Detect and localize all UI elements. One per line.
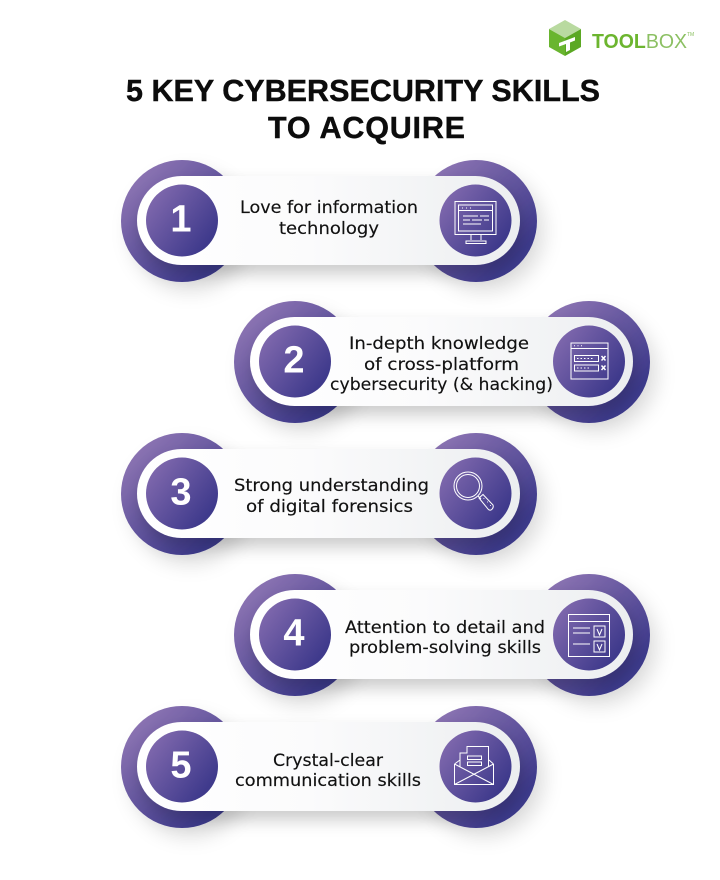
icon: green cube [549, 20, 581, 56]
icon: checklist window [568, 614, 610, 656]
panel: skill 1 [121, 160, 537, 282]
title: 5 KEY CYBERSECURITY SKILLS [126, 74, 600, 108]
number 4: 4 [283, 612, 305, 654]
trademark: TM [687, 32, 694, 38]
logo [549, 20, 694, 56]
text: skill 3 [234, 476, 429, 516]
icon: magnifying glass [454, 472, 493, 510]
text: skill 3: of digital forensics [246, 497, 413, 516]
text: skill 2: cybersecurity (& hacking) [330, 375, 553, 394]
logo wordmark: TOOLBOX [592, 30, 687, 53]
text: skill 5 [235, 751, 421, 790]
icon: open envelope with letter [454, 746, 494, 784]
text: skill 4 [345, 618, 545, 657]
text: skill 5: communication skills [235, 771, 421, 790]
text: skill 2: In-depth knowledge [349, 334, 529, 353]
title: TO ACQUIRE [268, 111, 465, 145]
number 5: 5 [170, 744, 192, 786]
text: skill 5: Crystal-clear [273, 751, 383, 770]
panel: skill 5 [121, 706, 537, 828]
icon: computer monitor [455, 202, 496, 244]
text: skill 1: technology [279, 219, 379, 238]
number 3: 3 [170, 472, 192, 514]
panel: skill 4 [234, 574, 650, 696]
number 1: 1 [170, 198, 192, 240]
panel: skill 3 [121, 433, 537, 555]
text: skill 1: Love for information [240, 198, 418, 217]
text: skill 4: Attention to detail and [345, 618, 545, 637]
number 2: 2 [283, 340, 305, 382]
text: skill 1 [240, 198, 418, 238]
title [126, 74, 600, 145]
icon: browser form with crosses [571, 343, 608, 379]
text: skill 4: problem-solving skills [349, 638, 541, 657]
text: skill 2 [330, 334, 553, 394]
text: skill 3: Strong understanding [234, 476, 429, 495]
text: skill 2: of cross-platform [364, 355, 519, 374]
panel: skill 2 [234, 301, 650, 423]
